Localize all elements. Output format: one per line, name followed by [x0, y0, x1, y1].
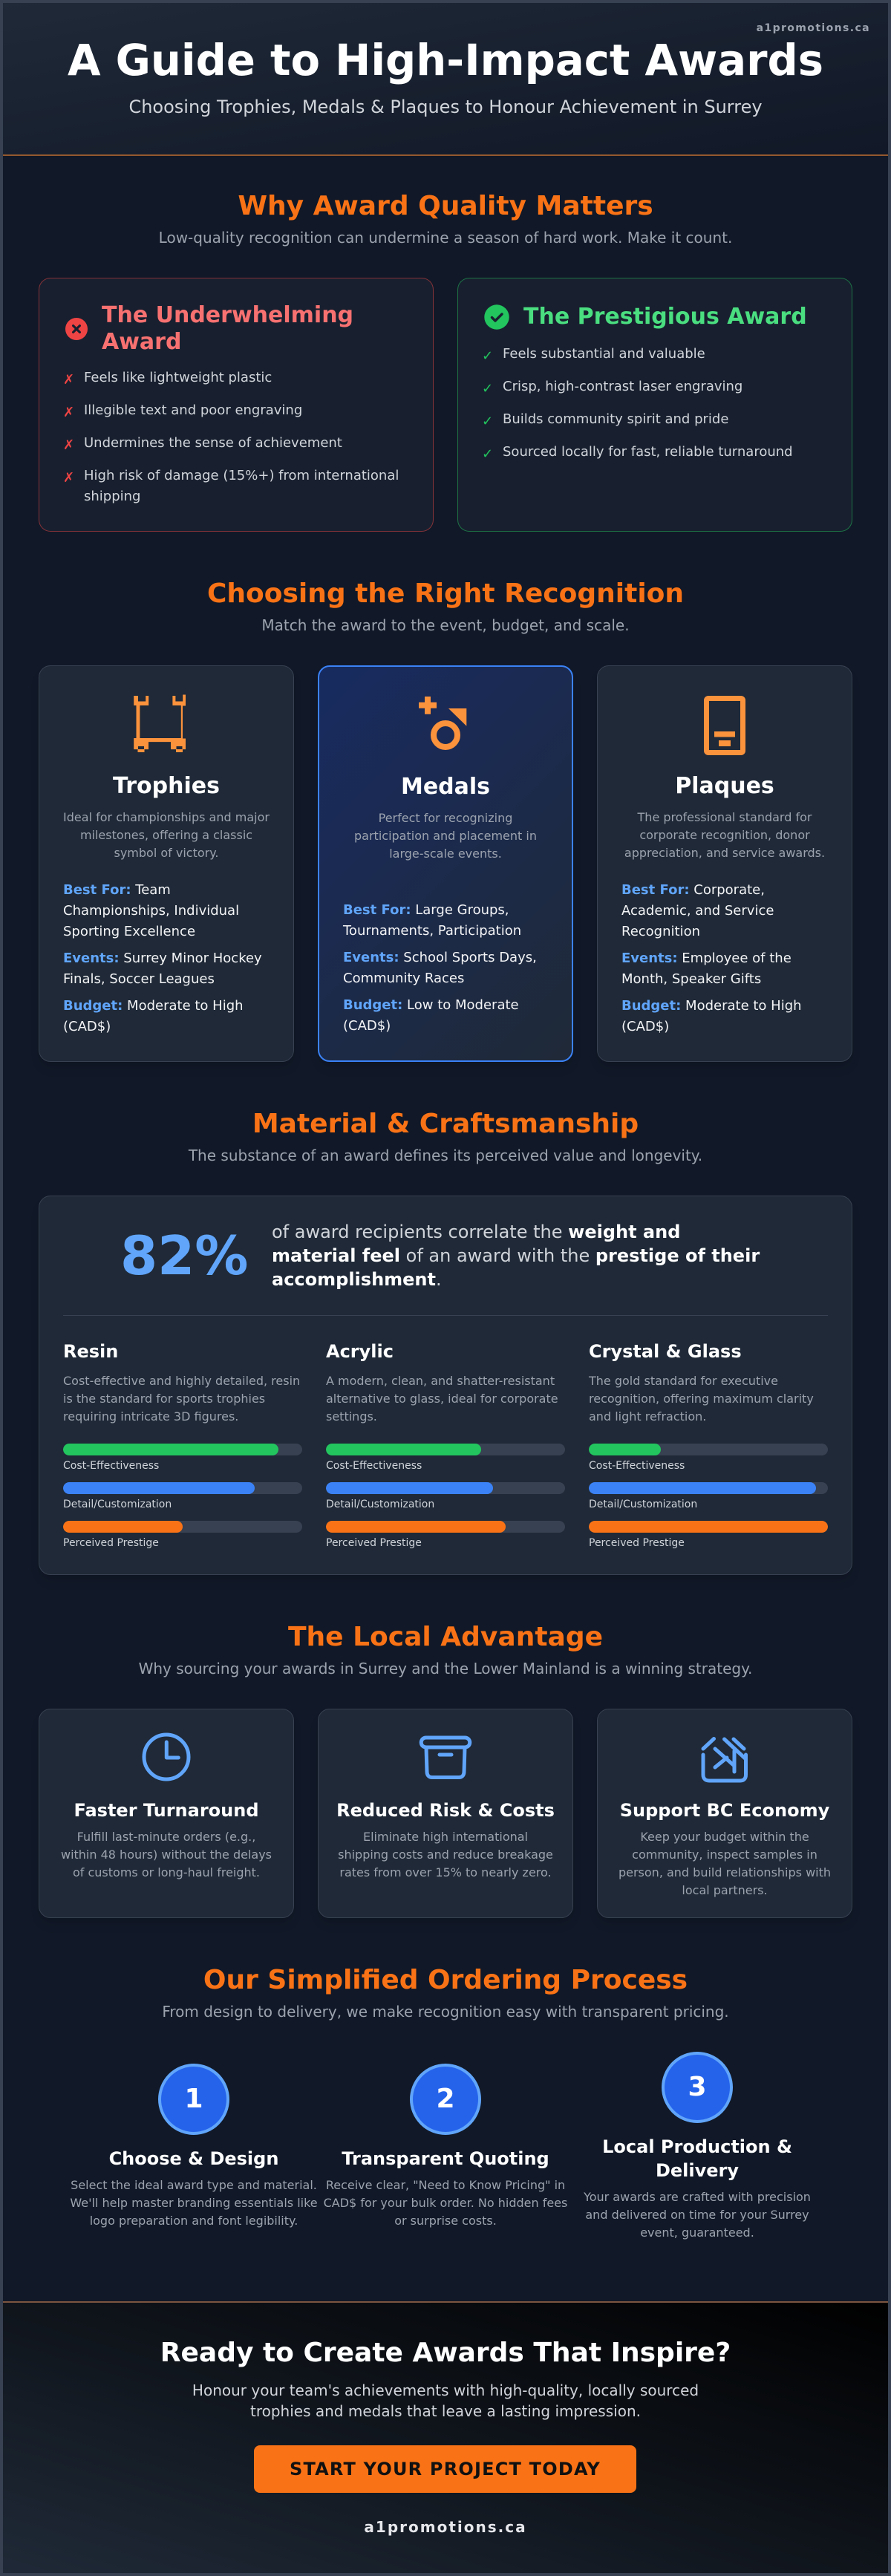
heading: the underwhelming award: Award [102, 329, 181, 355]
details: plaques: Budget: Moderate to High [621, 998, 802, 1014]
bar: prestige 75% [326, 1521, 565, 1533]
description: trophies: Ideal for championships and major [63, 810, 270, 824]
icon: green check circle [484, 304, 509, 330]
description: faster turnaround: of customs or long-haul freight. [73, 1865, 260, 1879]
name: resin: Resin [63, 1341, 118, 1362]
description: acrylic: A modern, clean, and shatter-resistant [326, 1374, 555, 1388]
header [3, 3, 888, 156]
description: reduced risk and costs [338, 1830, 553, 1879]
step description 2: CAD$ for your bulk order. No hidden fees [324, 2196, 567, 2210]
bar: detail 95% [589, 1482, 828, 1494]
description: support bc economy: local partners. [682, 1883, 768, 1897]
subheading: recognition: Match the award to the event, budget, and scale. [261, 616, 630, 634]
material column: resin: Perceived Prestige [63, 1537, 159, 1549]
material column: crystal and glass: Detail/Customization [589, 1499, 697, 1510]
description: crystal and glass: recognition, offering maximum clarity [589, 1392, 814, 1406]
description: resin: Cost-effective and highly detailed, resin [63, 1374, 300, 1388]
description: plaques: appreciation, and service awards. [624, 846, 825, 860]
list: prestigious traits: ✓ [482, 414, 493, 429]
details: plaques: Best For: Corporate, [621, 882, 765, 898]
step title 2: Transparent Quoting [342, 2148, 549, 2169]
step 3 [584, 2052, 811, 2240]
number badge 1: 1 [184, 2084, 203, 2114]
step description 3: event, guaranteed. [640, 2226, 754, 2240]
details: plaques: Month, Speaker Gifts [621, 971, 761, 987]
material column: acrylic: Perceived Prestige [326, 1537, 422, 1549]
material column: resin: Cost-Effectiveness [63, 1460, 159, 1472]
details: trophies: (CAD$) [63, 1019, 111, 1034]
bar: detail 80% [63, 1482, 302, 1494]
material column: crystal and glass [588, 1341, 828, 1549]
panel: materials [39, 1196, 852, 1575]
panel: medals (highlighted) [318, 665, 573, 1062]
bar: cost-effectiveness 65% [326, 1444, 565, 1455]
details: medals: Budget: Low to Moderate [343, 997, 519, 1013]
description: plaques [624, 810, 825, 860]
list: prestigious traits: Builds community spirit and pride [503, 411, 728, 427]
details: medals: Community Races [343, 971, 464, 986]
heading: the underwhelming award: The Underwhelming [102, 302, 353, 328]
footer paragraph: trophies and medals that leave a lasting impression. [250, 2402, 641, 2420]
description: faster turnaround: within 48 hours) without the delays [61, 1848, 272, 1862]
description: plaques: The professional standard for [638, 810, 812, 824]
details: trophies: Best For: Team [63, 882, 171, 898]
step description 3: Your awards are crafted with precision [584, 2190, 811, 2204]
title: support bc economy: Support BC Economy [620, 1800, 829, 1821]
stat description [272, 1222, 760, 1290]
description: medals: large-scale events. [389, 847, 502, 861]
description: support bc economy: Keep your budget within the [640, 1830, 809, 1844]
number badge 2 [410, 2064, 481, 2135]
step description 2 [324, 2178, 567, 2228]
step description 2: or surprise costs. [394, 2214, 497, 2228]
subheading: ordering: From design to delivery, we make recognition easy with transparent pricing. [162, 2003, 729, 2021]
icon: clock [143, 1733, 190, 1781]
description: trophies: milestones, offering a classic [80, 828, 252, 842]
footer paragraph [192, 2381, 699, 2420]
button: start your project today [254, 2445, 636, 2493]
list: underwhelming traits: Feels like lightweight plastic [84, 370, 272, 385]
step description 1: Select the ideal award type and material. [71, 2178, 317, 2192]
title: faster turnaround: Faster Turnaround [74, 1800, 259, 1821]
panel: plaques [597, 665, 852, 1062]
material column: acrylic: Detail/Customization [326, 1499, 434, 1510]
step description 3 [584, 2190, 811, 2240]
button: start your project today: START YOUR PROJECT TODAY [290, 2459, 601, 2479]
text: shipping [84, 489, 140, 504]
heading: material and craftsmanship: Material & Craftsmanship [252, 1109, 639, 1139]
stat description: material feel of an award with the prestige of their [272, 1245, 760, 1266]
details: medals: Events: School Sports Days, [343, 950, 537, 965]
description: medals: participation and placement in [354, 829, 537, 843]
details: medals: Tournaments, Participation [343, 923, 521, 939]
details: trophies: Sporting Excellence [63, 924, 195, 939]
description: faster turnaround: Fulfill last-minute orders (e.g., [77, 1830, 255, 1844]
description: support bc economy: person, and build relationships with [619, 1865, 831, 1879]
description: plaques: corporate recognition, donor [639, 828, 810, 842]
heading: our simplified ordering process: Our Simplified Ordering Process [203, 1965, 688, 1995]
details: plaques: (CAD$) [621, 1019, 669, 1034]
description: acrylic [326, 1374, 558, 1424]
description: crystal and glass: and light refraction. [589, 1409, 706, 1424]
number badge 1 [158, 2064, 229, 2135]
material column: acrylic: Cost-Effectiveness [326, 1460, 422, 1472]
footer paragraph: Honour your team's achievements with high-quality, locally sourced [192, 2381, 699, 2399]
title: reduced risk and costs: Reduced Risk & Costs [336, 1800, 555, 1821]
icon: red x circle [65, 318, 88, 340]
subheading: quality: Low-quality recognition can undermine a season of hard work. Make it count. [159, 229, 732, 247]
icon: trophy [134, 695, 186, 752]
bar: detail 70% [326, 1482, 565, 1494]
description: trophies [63, 810, 270, 860]
description: crystal and glass [588, 1374, 814, 1424]
panel: the prestigious award [457, 278, 852, 532]
step 2 [324, 2064, 567, 2228]
subheading: local: Why sourcing your awards in Surrey and the Lower Mainland is a winning strategy. [139, 1660, 752, 1677]
panel: the underwhelming award [39, 278, 434, 532]
step 1 [70, 2064, 318, 2228]
list: prestigious traits: Sourced locally for fast, reliable turnaround [503, 444, 793, 460]
material column: acrylic [326, 1341, 565, 1549]
details: medals: (CAD$) [343, 1018, 391, 1034]
number badge 2: 2 [436, 2084, 455, 2114]
list: underwhelming traits [63, 370, 399, 504]
material column: resin [63, 1341, 302, 1549]
list: prestigious traits: Crisp, high-contrast laser engraving [503, 379, 742, 394]
description: reduced risk and costs: shipping costs and reduce breakage [338, 1848, 553, 1862]
subtitle: Choosing Trophies, Medals & Plaques to Honour Achievement in Surrey [128, 97, 763, 117]
title: medals: Medals [401, 774, 490, 800]
bar: cost-effectiveness 90% [63, 1444, 302, 1455]
stat: 82 percent: 82% [120, 1225, 248, 1287]
main title: A Guide to High-Impact Awards [68, 36, 823, 85]
stat description: of award recipients correlate the weight and [272, 1222, 680, 1242]
description: trophies: symbol of victory. [114, 846, 218, 860]
details: plaques: Events: Employee of the [621, 950, 792, 966]
details: trophies: Championships, Individual [63, 903, 239, 919]
details: medals [343, 902, 537, 1034]
list: prestigious traits [482, 346, 793, 462]
step description 2: Receive clear, "Need to Know Pricing" in [326, 2178, 565, 2192]
heading: choosing the right recognition: Choosing the Right Recognition [207, 578, 684, 609]
panel: trophies [39, 665, 294, 1062]
description: faster turnaround [61, 1830, 272, 1879]
details: plaques: Academic, and Service [621, 903, 774, 919]
icon: medal [419, 697, 466, 750]
number badge 3 [662, 2052, 733, 2123]
list: underwhelming traits: ✗ [63, 470, 74, 486]
name: acrylic: Acrylic [326, 1341, 394, 1362]
step description 1: logo preparation and font legibility. [90, 2214, 298, 2228]
description: resin: requiring intricate 3D figures. [63, 1409, 238, 1424]
heading: the prestigious award: The Prestigious Award [523, 304, 807, 330]
material column: crystal and glass: Perceived Prestige [589, 1537, 685, 1549]
title: trophies: Trophies [113, 773, 220, 799]
description: acrylic: settings. [326, 1409, 377, 1424]
panel: reduced risk and costs [318, 1709, 573, 1918]
details: trophies [63, 882, 262, 1034]
description: reduced risk and costs: rates from over 15% to nearly zero. [339, 1865, 552, 1879]
list: underwhelming traits: ✗ [63, 405, 74, 420]
bar: prestige 100% [589, 1521, 828, 1533]
step title 3 [602, 2136, 792, 2181]
list: prestigious traits: ✓ [482, 446, 493, 462]
list: underwhelming traits: Illegible text and poor engraving [84, 402, 302, 418]
step description 1: We'll help master branding essentials like [70, 2196, 318, 2210]
list: prestigious traits: Feels substantial and valuable [503, 346, 705, 362]
heading: why award quality matters: Why Award Quality Matters [238, 191, 653, 221]
stat description: accomplishment. [272, 1269, 442, 1290]
description: medals [354, 811, 537, 861]
description: reduced risk and costs: Eliminate high international [363, 1830, 528, 1844]
description: medals: Perfect for recognizing [379, 811, 512, 825]
icon: archive box [419, 1736, 472, 1779]
name: crystal and glass: Crystal & Glass [589, 1341, 742, 1362]
description: resin [63, 1374, 300, 1424]
description: crystal and glass: The gold standard for executive [589, 1374, 778, 1388]
footer site url: a1promotions.ca [364, 2518, 527, 2536]
step description 1 [70, 2178, 318, 2228]
icon: local home [701, 1737, 748, 1782]
step description 3: and delivered on time for your Surrey [585, 2208, 809, 2222]
title: plaques: Plaques [675, 773, 774, 799]
description: acrylic: alternative to glass, ideal for corporate [326, 1392, 558, 1406]
panel: support bc economy [597, 1709, 852, 1918]
subheading: material: The substance of an award defines its perceived value and longevity. [189, 1147, 702, 1164]
details: medals: Best For: Large Groups, [343, 902, 509, 918]
step title 3: Local Production & [602, 2136, 792, 2157]
description: support bc economy [619, 1830, 831, 1897]
heading: the underwhelming award [102, 302, 353, 355]
details: plaques: Recognition [621, 924, 700, 939]
icon: plaque [704, 696, 745, 755]
details: trophies: Finals, Soccer Leagues [63, 971, 215, 987]
list: underwhelming traits: ✗ [63, 437, 74, 453]
details: trophies: Events: Surrey Minor Hockey [63, 950, 262, 966]
bar: prestige 50% [63, 1521, 302, 1533]
footer call to action [3, 2301, 888, 2573]
panel: faster turnaround [39, 1709, 294, 1918]
material column: resin: Detail/Customization [63, 1499, 172, 1510]
heading: the local advantage: The Local Advantage [288, 1622, 603, 1652]
list: prestigious traits: ✓ [482, 348, 493, 364]
description: resin: is the standard for sports trophies [63, 1392, 265, 1406]
list: underwhelming traits: High risk of damage (15%+) from international [84, 468, 399, 483]
number badge 3: 3 [688, 2072, 707, 2102]
description: support bc economy: community, inspect samples in [632, 1848, 817, 1862]
site url top right: a1promotions.ca [757, 22, 870, 34]
footer heading: Ready to Create Awards That Inspire? [160, 2338, 731, 2368]
bar: cost-effectiveness 30% [589, 1444, 828, 1455]
details: plaques [621, 882, 802, 1034]
list: underwhelming traits: ✗ [63, 372, 74, 388]
material column: crystal and glass: Cost-Effectiveness [589, 1460, 685, 1472]
step title 3: Delivery [656, 2160, 739, 2181]
step title 1: Choose & Design [109, 2148, 278, 2169]
details: trophies: Budget: Moderate to High [63, 998, 244, 1014]
list: prestigious traits: ✓ [482, 381, 493, 397]
list: underwhelming traits: Undermines the sense of achievement [84, 435, 342, 451]
